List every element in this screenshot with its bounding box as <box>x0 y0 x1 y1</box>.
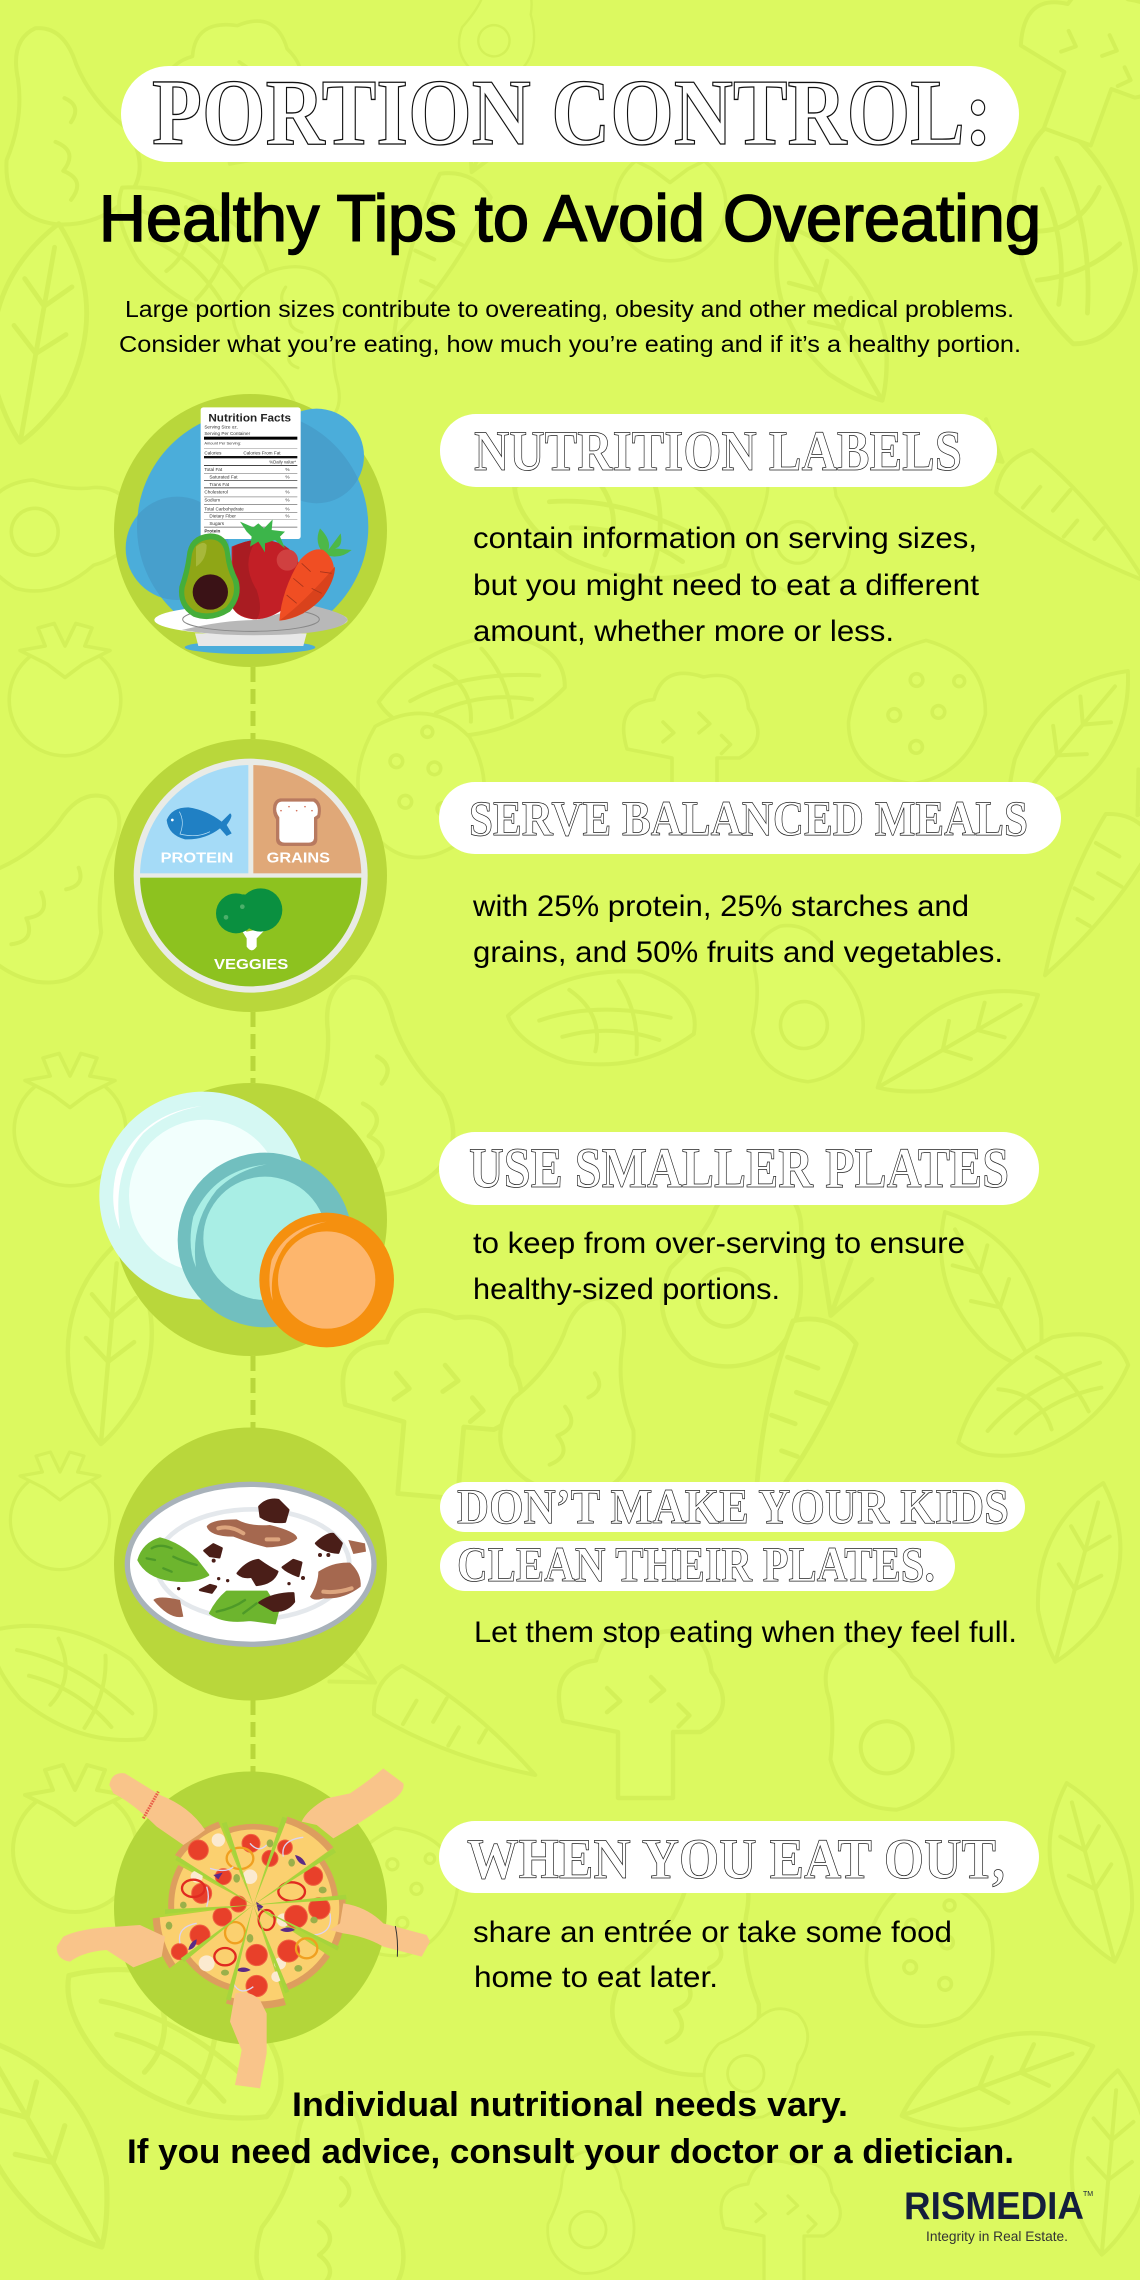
icon: fish <box>167 807 232 839</box>
tomato <box>232 519 301 619</box>
nutrition facts label: % <box>285 498 289 503</box>
text: nutrition labels: contain information on serving sizes, <box>473 522 977 555</box>
icon: sharing pizza <box>57 1768 430 2088</box>
nutrition facts label: Serving Size oz. <box>204 424 238 429</box>
text: when you eat out: share an entrée or take some food <box>473 1916 952 1949</box>
text: nutrition labels <box>473 522 980 648</box>
intro text: Consider what you’re eating, how much you’re eating and if it’s a healthy portion. <box>119 331 1021 357</box>
hand: bottom <box>230 1992 267 2088</box>
nutrition facts label: % <box>285 506 289 511</box>
carrot <box>279 528 352 621</box>
text: serve balanced meals: grains, and 50% fruits and vegetables. <box>473 936 1003 969</box>
footer note: If you need advice, consult your doctor or a dietician. <box>127 2133 1014 2171</box>
heading: nutrition labels: NUTRITION LABELS <box>474 420 962 483</box>
intro text <box>119 296 1021 357</box>
title: PORTION CONTROL: <box>152 61 992 165</box>
icon: balanced plate <box>114 739 387 1012</box>
intro text: Large portion sizes contribute to overeating, obesity and other medical problems. <box>125 296 1014 322</box>
logo: RISMedia: Integrity in Real Estate. <box>926 2228 1068 2244</box>
avocado <box>179 533 240 619</box>
pizza slices <box>153 1817 346 2009</box>
heading: don't make your kids clean their plates: CLEAN THEIR PLATES. <box>457 1536 935 1592</box>
text: nutrition labels: but you might need to eat a different <box>473 569 980 602</box>
nutrition facts label: Calories <box>204 450 222 455</box>
text: when you eat out <box>473 1916 952 1994</box>
nutrition facts label <box>201 407 301 539</box>
text: don't make your kids: Let them stop eating when they feel full. <box>474 1616 1017 1649</box>
subtitle: Healthy Tips to Avoid Overeating <box>99 181 1041 255</box>
small plate <box>259 1213 394 1347</box>
text: serve balanced meals: with 25% protein, 25% starches and <box>472 890 969 923</box>
nutrition facts label: % <box>285 489 289 494</box>
pizza toppings <box>166 1833 330 1997</box>
leftover greens <box>138 1538 278 1623</box>
logo: RISMedia: TM <box>1083 2191 1093 2198</box>
crumbs <box>177 1553 330 1590</box>
hand: top-right <box>302 1768 404 1838</box>
nutrition facts label: Protein <box>204 529 221 534</box>
hand: right <box>330 1903 430 1957</box>
panel: use smaller plates <box>439 1132 1039 1306</box>
heading: when you eat out: WHEN YOU EAT OUT, <box>467 1828 1005 1891</box>
icon: balanced plate: PROTEIN <box>161 850 233 867</box>
footer note <box>127 2086 1014 2171</box>
text: serve balanced meals <box>472 890 1003 969</box>
nutrition facts label: Amount Per Serving: <box>204 440 241 445</box>
footer note: Individual nutritional needs vary. <box>292 2086 848 2124</box>
heading: don't make your kids clean their plates <box>440 1478 1025 1592</box>
panel: nutrition labels <box>440 414 997 648</box>
nutrition facts label: Nutrition Facts <box>208 413 291 425</box>
heading: don't make your kids clean their plates: DON’T MAKE YOUR KIDS <box>457 1478 1009 1534</box>
plate <box>154 605 348 654</box>
heading: serve balanced meals: SERVE BALANCED MEALS <box>469 790 1028 846</box>
medium plate <box>178 1153 352 1327</box>
panel: when you eat out <box>439 1821 1039 1994</box>
heading: use smaller plates: USE SMALLER PLATES <box>469 1137 1009 1200</box>
nutrition facts label: Trans Fat <box>209 482 230 487</box>
text: when you eat out: home to eat later. <box>474 1961 718 1994</box>
icon: nutrition label with vegetables <box>114 394 387 667</box>
nutrition facts label: Sugars <box>209 521 225 526</box>
icon: stacked plates <box>99 1083 394 1356</box>
icon: balanced plate: GRAINS <box>267 850 330 867</box>
icon: balanced plate: VEGGIES <box>214 956 288 973</box>
icon: broccoli <box>216 888 282 950</box>
logo: RISMedia: RISMEDIA <box>904 2185 1084 2228</box>
nutrition facts label: Total Carbohydrate <box>204 506 244 511</box>
nutrition facts label: Cholesterol <box>204 489 228 494</box>
panel: serve balanced meals <box>439 782 1061 969</box>
text: nutrition labels: amount, whether more or less. <box>473 615 894 648</box>
hand: left <box>57 1925 165 1967</box>
nutrition facts label: % <box>285 474 289 479</box>
connector: dashed line <box>250 667 256 1772</box>
nutrition facts label: %Daily value* <box>269 459 296 464</box>
nutrition facts label: Serving Per Container <box>204 431 251 436</box>
nutrition facts label: Saturated Fat <box>209 474 238 479</box>
panel: don't make your kids clean their plates <box>440 1478 1025 1649</box>
large plate <box>99 1092 307 1300</box>
text: use smaller plates: healthy-sized portions. <box>473 1273 780 1306</box>
nutrition facts label: Calories From Fat <box>243 450 281 455</box>
leftover sauce <box>153 1519 366 1617</box>
nutrition facts label: % <box>285 467 289 472</box>
slice gaps <box>165 1817 347 2001</box>
hand: top-left <box>109 1773 205 1845</box>
text: use smaller plates: to keep from over-serving to ensure <box>473 1227 965 1260</box>
leftover meat <box>200 1500 342 1611</box>
nutrition facts label: Total Fat <box>204 467 223 472</box>
nutrition facts label: Dietary Fiber <box>209 514 236 519</box>
nutrition facts label: Sodium <box>204 498 220 503</box>
heading: serve balanced meals <box>439 782 1061 854</box>
text: use smaller plates <box>473 1227 965 1306</box>
icon: dirty plate <box>114 1428 387 1700</box>
nutrition facts label: % <box>285 514 289 519</box>
icon: bread <box>273 798 321 846</box>
